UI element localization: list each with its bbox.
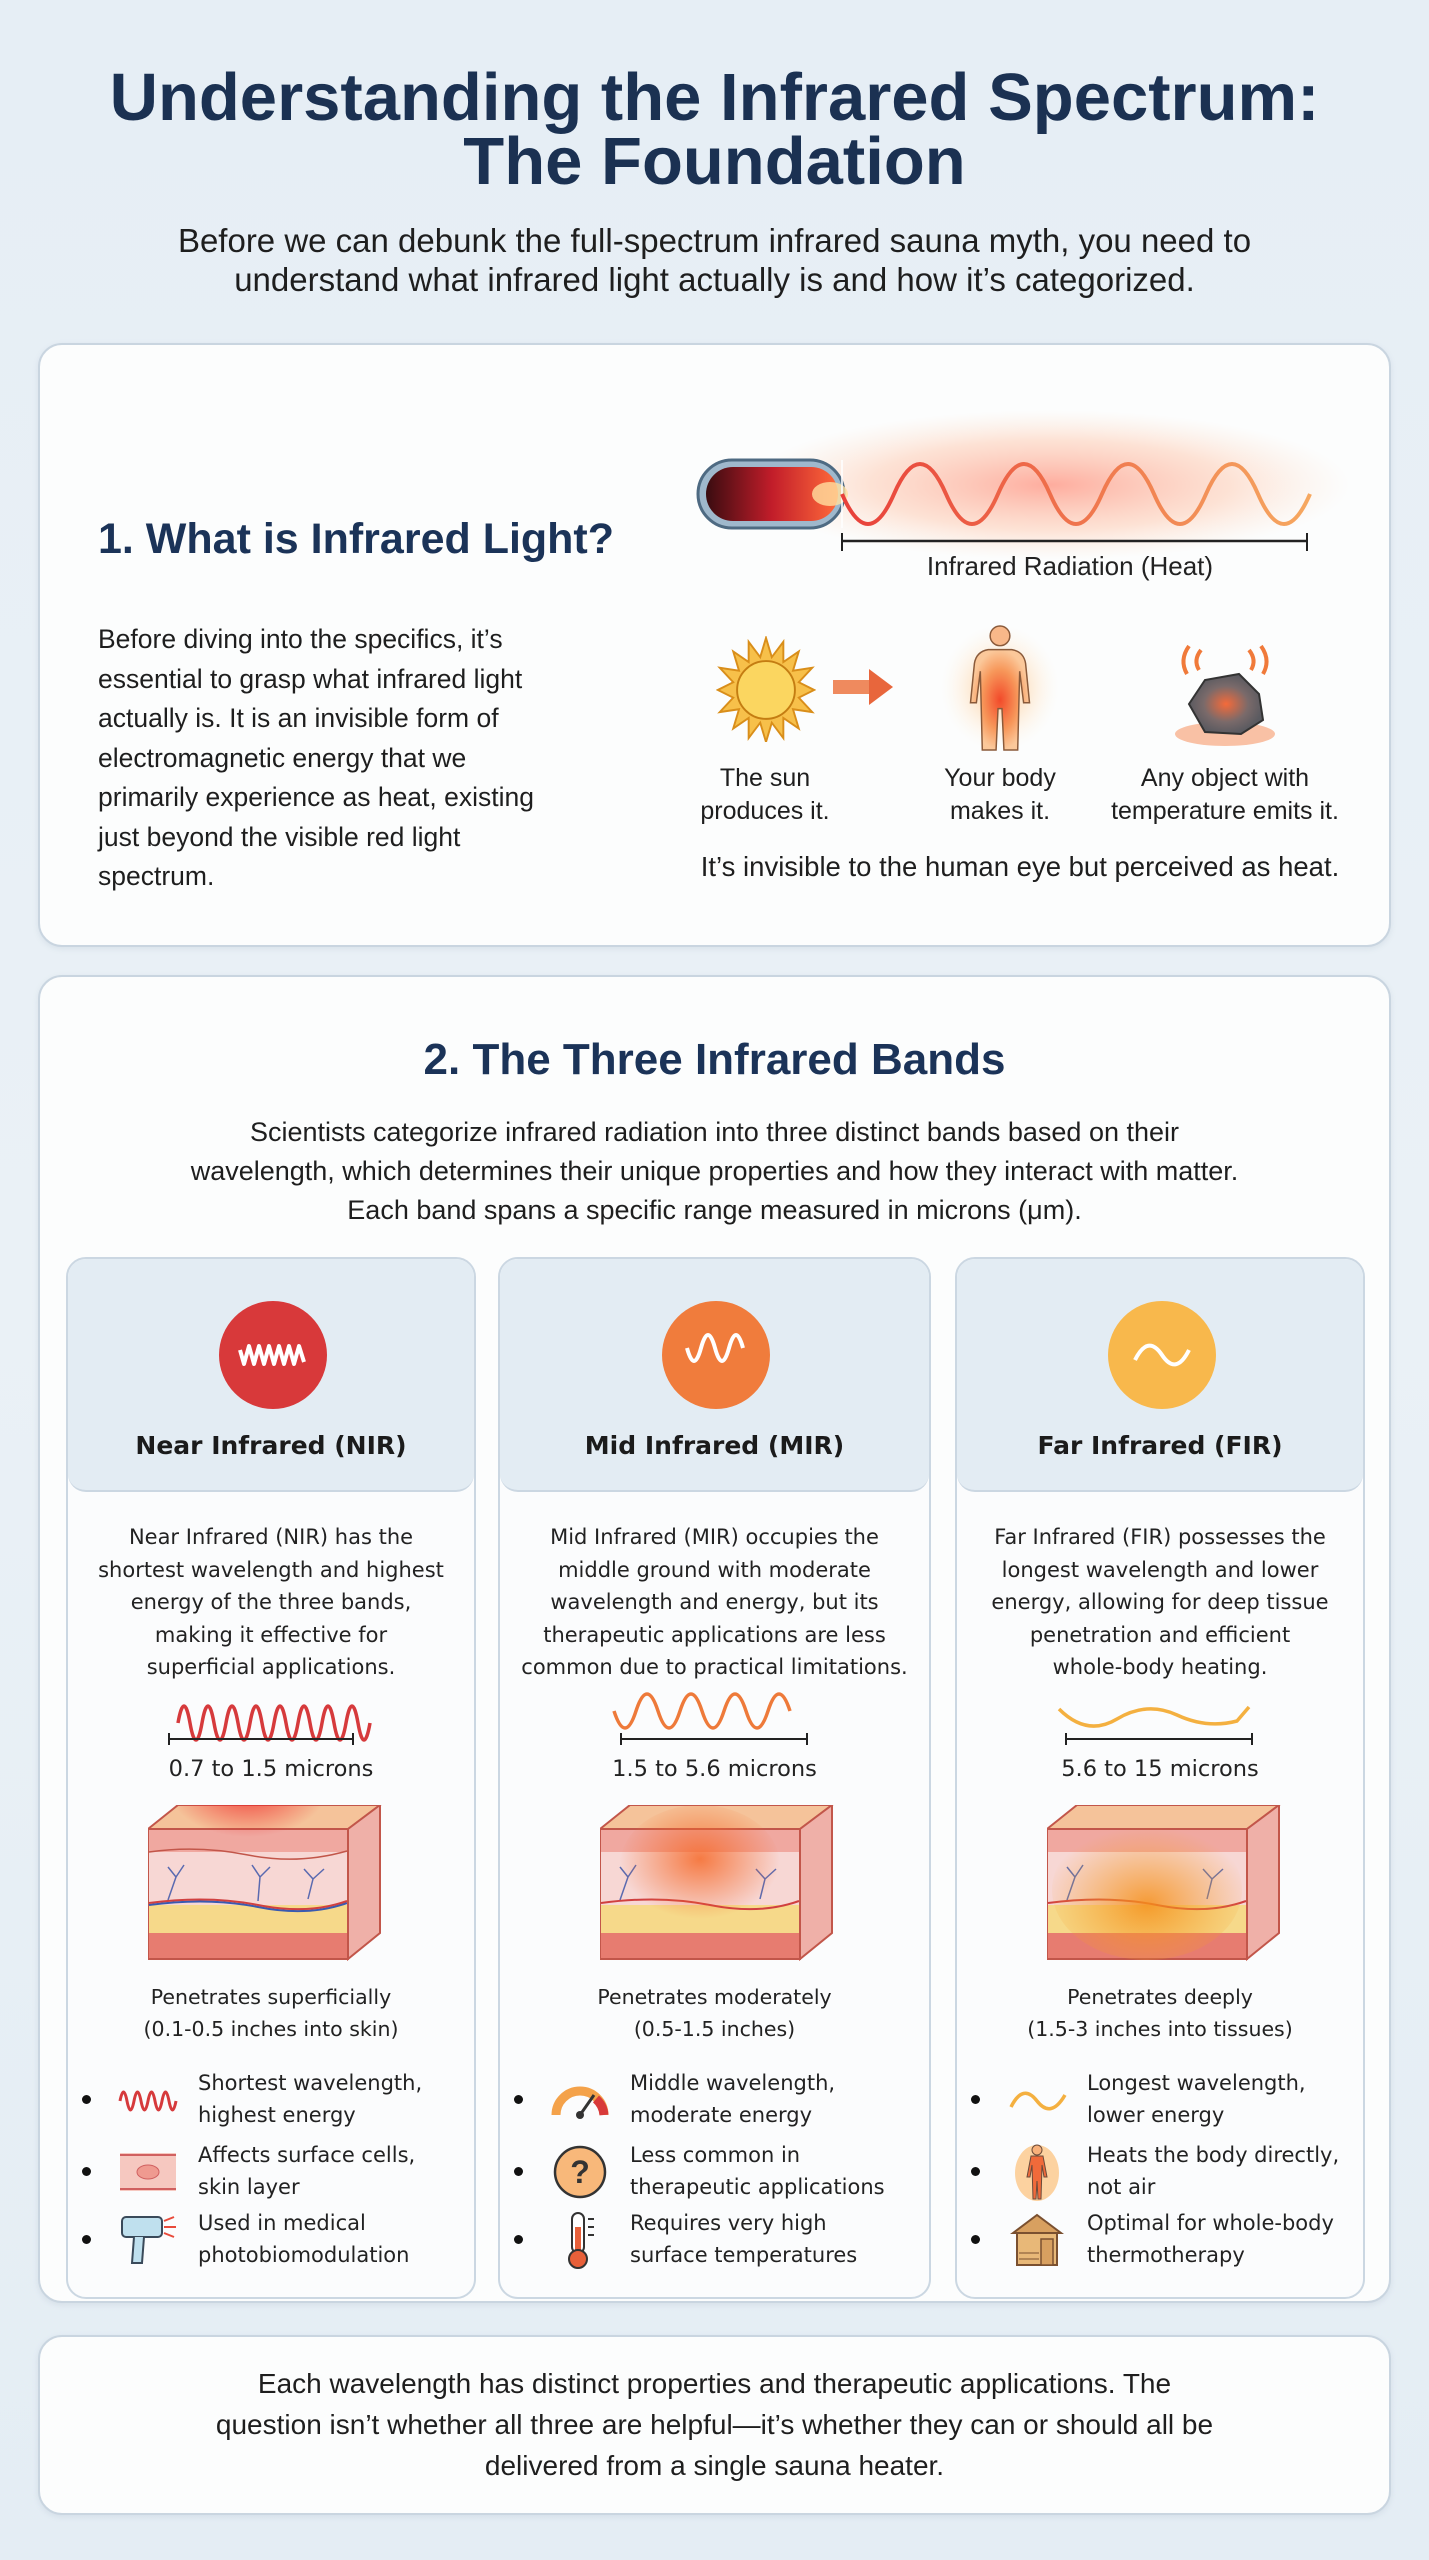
bullet: surface cells: skin layer [198, 2175, 300, 2199]
bullet: surface cells: Affects surface cells, [198, 2143, 415, 2167]
caption: object [1111, 764, 1339, 825]
bullet: heats body: not air [1087, 2175, 1155, 2199]
icon: sauna cabin [1007, 2211, 1069, 2269]
caption: body: Your body [944, 764, 1056, 792]
description: NIR: shortest wavelength and highest [98, 1558, 444, 1582]
card header: FIR [957, 1259, 1363, 1492]
description: MIR: common due to practical limitations. [521, 1655, 908, 1679]
arrow: sun to body [833, 669, 893, 705]
icon: skin cells [120, 2153, 176, 2191]
bullet: less common: therapeutic applications [630, 2175, 885, 2199]
heading: section 2: 2. The Three Infrared Bands [424, 1035, 1005, 1084]
note: invisible heat: It’s invisible to the human eye but perceived as heat. [701, 851, 1339, 882]
caption: body [944, 764, 1056, 825]
card title: FIR: Far Infrared (FIR) [1037, 1431, 1283, 1460]
label: MIR penetration: Penetrates moderately [597, 1985, 832, 2009]
caption: object: temperature emits it. [1111, 797, 1339, 825]
bullet: less common [514, 2143, 885, 2199]
card title: NIR: Near Infrared (NIR) [135, 1431, 407, 1460]
bullet: photobiomodulation: photobiomodulation [198, 2243, 409, 2267]
card: far infrared [955, 1257, 1365, 2299]
bullet: surface cells [82, 2143, 415, 2199]
text block: conclusion: question isn’t whether all three are helpful—it’s whether they can or should all be [216, 2409, 1213, 2440]
label: NIR penetration: Penetrates superficially [151, 1985, 391, 2009]
description: NIR: making it effective for [155, 1622, 387, 1646]
icon: question mark [554, 2146, 606, 2198]
icon: thermometer [568, 2212, 594, 2269]
bullet: middle wavelength: Middle wavelength, [630, 2071, 835, 2095]
text block: infrared definition: just beyond the visible red light [98, 822, 460, 852]
bullet: shortest wavelength [82, 2071, 422, 2127]
wave scale: FIR [1058, 1706, 1253, 1745]
caption: sun [700, 764, 830, 825]
caption: sun: The sun [720, 764, 810, 792]
card: mid infrared [498, 1257, 931, 2299]
icon: tight wave [118, 2090, 178, 2112]
bullet: middle wavelength [514, 2071, 835, 2127]
bullet: photobiomodulation [82, 2211, 409, 2267]
description: MIR [521, 1525, 908, 1679]
icon: warm body [1007, 2143, 1069, 2201]
panel: what is infrared light [38, 343, 1391, 947]
text block: infrared definition: primarily experience as heat, existing [98, 782, 534, 812]
description: NIR [98, 1525, 444, 1679]
illustration: skin penetration NIR [148, 1805, 382, 1961]
label: FIR penetration [1027, 1985, 1293, 2041]
bullet: less common: Less common in [630, 2143, 800, 2167]
wave scale: NIR [168, 1704, 372, 1745]
bullet: heats body: Heats the body directly, [1087, 2143, 1339, 2167]
text block: infrared definition: Before diving into the specifics, it’s [98, 624, 503, 654]
description: MIR: therapeutic applications are less [543, 1622, 886, 1646]
text block: infrared definition: essential to grasp what infrared light [98, 664, 522, 694]
description: FIR: longest wavelength and lower [1002, 1558, 1318, 1582]
text block: infrared definition: spectrum. [98, 861, 214, 891]
bullet: whole-body thermotherapy: thermotherapy [1087, 2243, 1245, 2267]
bullet: high temperatures: surface temperatures [630, 2243, 857, 2267]
icon: body [952, 625, 1048, 751]
label: MIR penetration [597, 1985, 832, 2041]
bullet: whole-body thermotherapy: Optimal for whole-body [1087, 2211, 1334, 2235]
description: FIR: energy, allowing for deep tissue [991, 1590, 1329, 1614]
caption: body: makes it. [950, 797, 1050, 825]
description: NIR: energy of the three bands, [131, 1590, 411, 1614]
wave scale: MIR [612, 1692, 808, 1745]
bullet: longest wavelength [971, 2071, 1306, 2127]
bullet: longest wavelength: Longest wavelength, [1087, 2071, 1306, 2095]
description: FIR [991, 1525, 1329, 1679]
icon: question mark: ? [570, 2154, 590, 2190]
title: Understanding the Infrared Spectrum: [110, 60, 1319, 135]
label: NIR microns: 0.7 to 1.5 microns [169, 1756, 373, 1782]
panel: three infrared bands [38, 975, 1391, 2303]
text block: bands intro: Each band spans a specific range measured in microns (μm). [347, 1195, 1082, 1225]
footer callout [38, 2335, 1391, 2515]
bullet: heats body [971, 2139, 1359, 2205]
bullet: high temperatures: Requires very high [630, 2211, 827, 2235]
icon: sun [716, 636, 816, 742]
description: FIR: Far Infrared (FIR) possesses the [994, 1525, 1326, 1549]
description: FIR: whole-body heating. [1053, 1655, 1267, 1679]
icon: MIR wave circle [662, 1301, 770, 1409]
icon: FIR wave circle [1108, 1301, 1216, 1409]
subtitle: Before we can debunk the full-spectrum infrared sauna myth, you need to [178, 222, 1251, 259]
caption: object: Any object with [1141, 764, 1309, 792]
bullet: middle wavelength: moderate energy [630, 2103, 812, 2127]
label: MIR penetration: (0.5-1.5 inches) [634, 2017, 795, 2041]
card header: MIR [500, 1259, 929, 1492]
illustration: skin penetration MIR [600, 1805, 834, 1961]
illustration: skin penetration FIR [1047, 1805, 1280, 1961]
label: NIR penetration: (0.1-0.5 inches into skin) [144, 2017, 398, 2041]
title [110, 60, 1319, 199]
text block: bands intro: wavelength, which determines their unique properties and how they interact with matter. [191, 1156, 1238, 1186]
card title: MIR: Mid Infrared (MIR) [585, 1431, 844, 1460]
text block: conclusion: Each wavelength has distinct properties and therapeutic applications. The [258, 2368, 1171, 2399]
icon: NIR wave circle [219, 1301, 327, 1409]
text block: infrared definition [97, 624, 534, 891]
title: The Foundation [463, 124, 966, 199]
bullet: high temperatures [514, 2211, 857, 2269]
card header: NIR [68, 1259, 474, 1492]
description: NIR: Near Infrared (NIR) has the [129, 1525, 413, 1549]
description: MIR: middle ground with moderate [558, 1558, 871, 1582]
description: MIR: Mid Infrared (MIR) occupies the [550, 1525, 879, 1549]
text block: bands intro: Scientists categorize infrared radiation into three distinct bands based on their [250, 1117, 1179, 1147]
text block: infrared definition: electromagnetic energy that we [98, 742, 466, 772]
label: NIR penetration [144, 1985, 398, 2041]
description: MIR: wavelength and energy, but its [550, 1590, 879, 1614]
label: FIR microns: 5.6 to 15 microns [1061, 1756, 1259, 1782]
subtitle: understand what infrared light actually is and how it’s categorized. [234, 261, 1195, 298]
text block: infrared definition: actually is. It is an invisible form of [98, 703, 499, 733]
bullet: photobiomodulation: Used in medical [198, 2211, 366, 2235]
icon: long wave [1007, 2071, 1069, 2129]
bullet: whole-body thermotherapy [971, 2207, 1359, 2273]
label: FIR penetration: Penetrates deeply [1067, 1985, 1253, 2009]
icon: device [121, 2216, 176, 2264]
bullet: longest wavelength: lower energy [1087, 2103, 1224, 2127]
subtitle [178, 222, 1251, 298]
text block: conclusion [40, 2363, 1389, 2486]
illustration: heater emitting infrared wave [696, 418, 1318, 552]
bullet: shortest wavelength: highest energy [198, 2103, 356, 2127]
description: FIR: penetration and efficient [1030, 1622, 1290, 1646]
caption: sun: produces it. [700, 797, 830, 825]
icon: gauge [552, 2086, 608, 2119]
label: FIR penetration: (1.5-3 inches into tissues) [1027, 2017, 1293, 2041]
text block: conclusion: delivered from a single sauna heater. [485, 2450, 944, 2481]
bullet: shortest wavelength: Shortest wavelength, [198, 2071, 422, 2095]
icon: hot rock [1175, 644, 1275, 746]
text block: bands intro [190, 1117, 1238, 1225]
label: infrared radiation: Infrared Radiation (Heat) [927, 551, 1213, 581]
label: MIR microns: 1.5 to 5.6 microns [612, 1756, 817, 1782]
heading: section 1: 1. What is Infrared Light? [98, 515, 614, 563]
description: NIR: superficial applications. [147, 1655, 395, 1679]
card: near infrared [66, 1257, 476, 2299]
